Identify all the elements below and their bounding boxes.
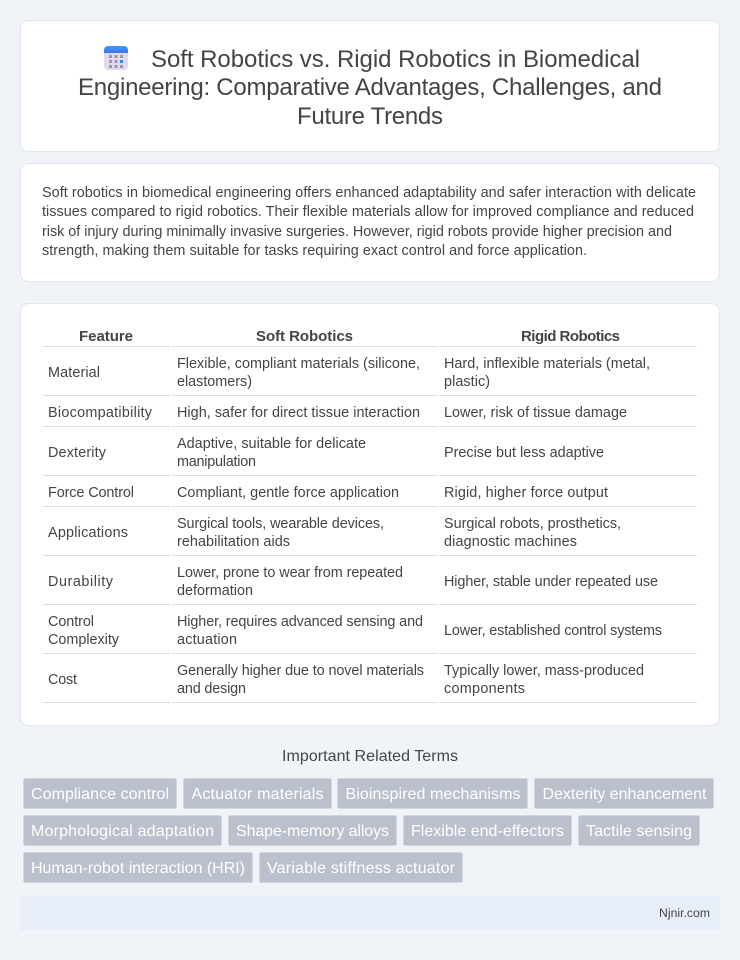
tag <box>404 816 572 846</box>
heading: related terms: Important Related Terms <box>282 748 458 765</box>
row: Cost: Generally higher due to novel materials <box>177 663 424 679</box>
table header: Rigid Robotics <box>521 328 620 345</box>
tag <box>24 778 176 808</box>
row: Durability <box>48 565 658 599</box>
footer bar <box>20 896 720 930</box>
footer bar: Njnir.com <box>659 906 710 920</box>
row: Dexterity: Precise but less adaptive <box>444 445 604 461</box>
tag: Shape-memory alloys <box>236 823 389 840</box>
table header <box>79 328 620 345</box>
tag <box>534 778 714 808</box>
panel: intro paragraph <box>20 164 720 282</box>
tag <box>578 816 700 846</box>
icon: calendar grid <box>104 46 128 70</box>
tag: Actuator materials <box>192 786 324 803</box>
tag <box>228 816 396 846</box>
intro text: Soft robotics in biomedical engineering offers enhanced adaptability and safer interaction with delicate <box>42 185 696 201</box>
row: Control Complexity: Lower, established control systems <box>444 623 662 639</box>
row: Applications: diagnostic machines <box>444 534 577 550</box>
row: Cost: Typically lower, mass-produced <box>444 663 644 679</box>
row: Material: plastic) <box>444 374 490 390</box>
row: Durability: Durability <box>48 574 114 590</box>
tag <box>338 778 528 808</box>
tag <box>24 816 222 846</box>
tag: Compliance control <box>31 786 169 803</box>
row: Applications: Surgical tools, wearable devices, <box>177 516 384 532</box>
row: Applications: Surgical robots, prosthetics, <box>444 516 621 532</box>
row: Force Control: Compliant, gentle force application <box>177 485 399 501</box>
table header: Soft Robotics <box>256 328 353 345</box>
row: Material: elastomers) <box>177 374 252 390</box>
row: Dexterity <box>48 436 604 470</box>
row: Cost <box>48 663 644 697</box>
tag: Human-robot interaction (HRI) <box>31 860 245 877</box>
row: Material: Flexible, compliant materials (silicone, <box>177 356 420 372</box>
tag <box>260 852 462 882</box>
row: Cost: and design <box>177 681 246 697</box>
row: Force Control: Force Control <box>48 485 134 501</box>
row: Dexterity: Dexterity <box>48 445 107 461</box>
intro text <box>42 185 696 259</box>
row: Durability: Higher, stable under repeated use <box>444 574 658 590</box>
tag <box>184 778 332 808</box>
row: Biocompatibility: Lower, risk of tissue damage <box>444 405 627 421</box>
row: Applications <box>48 516 621 550</box>
row: Biocompatibility: Biocompatibility <box>48 405 153 421</box>
intro text: strength, making them suitable for tasks requiring exact control and force application. <box>42 243 587 259</box>
intro text: tissues compared to rigid robotics. Their flexible materials allow for improved compliance and reduced <box>42 204 694 220</box>
row: Cost: Cost <box>48 672 77 688</box>
row: Material: Material <box>48 365 100 381</box>
title: Engineering: Comparative Advantages, Challenges, and <box>78 74 662 101</box>
row: Control Complexity: actuation <box>177 632 237 648</box>
table header: Feature <box>79 328 133 345</box>
tag: Dexterity enhancement <box>542 786 707 803</box>
tag <box>24 852 252 882</box>
tag: Bioinspired mechanisms <box>346 786 520 803</box>
row: Durability: Lower, prone to wear from repeated <box>177 565 403 581</box>
intro text: risk of injury during minimally invasive surgeries. However, rigid robots provide higher precision and <box>42 224 672 240</box>
row: Control Complexity: Higher, requires advanced sensing and <box>177 614 423 630</box>
title <box>78 46 662 130</box>
row: Material: Hard, inflexible materials (metal, <box>444 356 650 372</box>
title: Future Trends <box>297 103 443 130</box>
tag: Tactile sensing <box>586 823 692 840</box>
row: Force Control <box>48 485 608 501</box>
panel: comparison table <box>20 304 720 726</box>
row: Control Complexity: Control <box>48 614 94 630</box>
row: Material <box>48 356 650 390</box>
row: Control Complexity <box>48 614 662 648</box>
row: Applications: rehabilitation aids <box>177 534 290 550</box>
tag list <box>24 778 714 882</box>
title: Soft Robotics vs. Rigid Robotics in Biomedical <box>151 46 640 73</box>
row: Biocompatibility <box>48 405 627 421</box>
row: Control Complexity: Complexity <box>48 632 120 648</box>
row: Force Control: Rigid, higher force output <box>444 485 608 501</box>
tag: Variable stiffness actuator <box>267 860 456 877</box>
tag: Morphological adaptation <box>31 823 214 840</box>
row: Applications: Applications <box>48 525 128 541</box>
tag: Flexible end-effectors <box>411 823 564 840</box>
panel: title card <box>20 20 720 152</box>
row: Dexterity: manipulation <box>177 454 256 470</box>
row: Durability: deformation <box>177 583 253 599</box>
row: Dexterity: Adaptive, suitable for delicate <box>177 436 366 452</box>
row: Cost: components <box>444 681 525 697</box>
row: Biocompatibility: High, safer for direct tissue interaction <box>177 405 420 421</box>
